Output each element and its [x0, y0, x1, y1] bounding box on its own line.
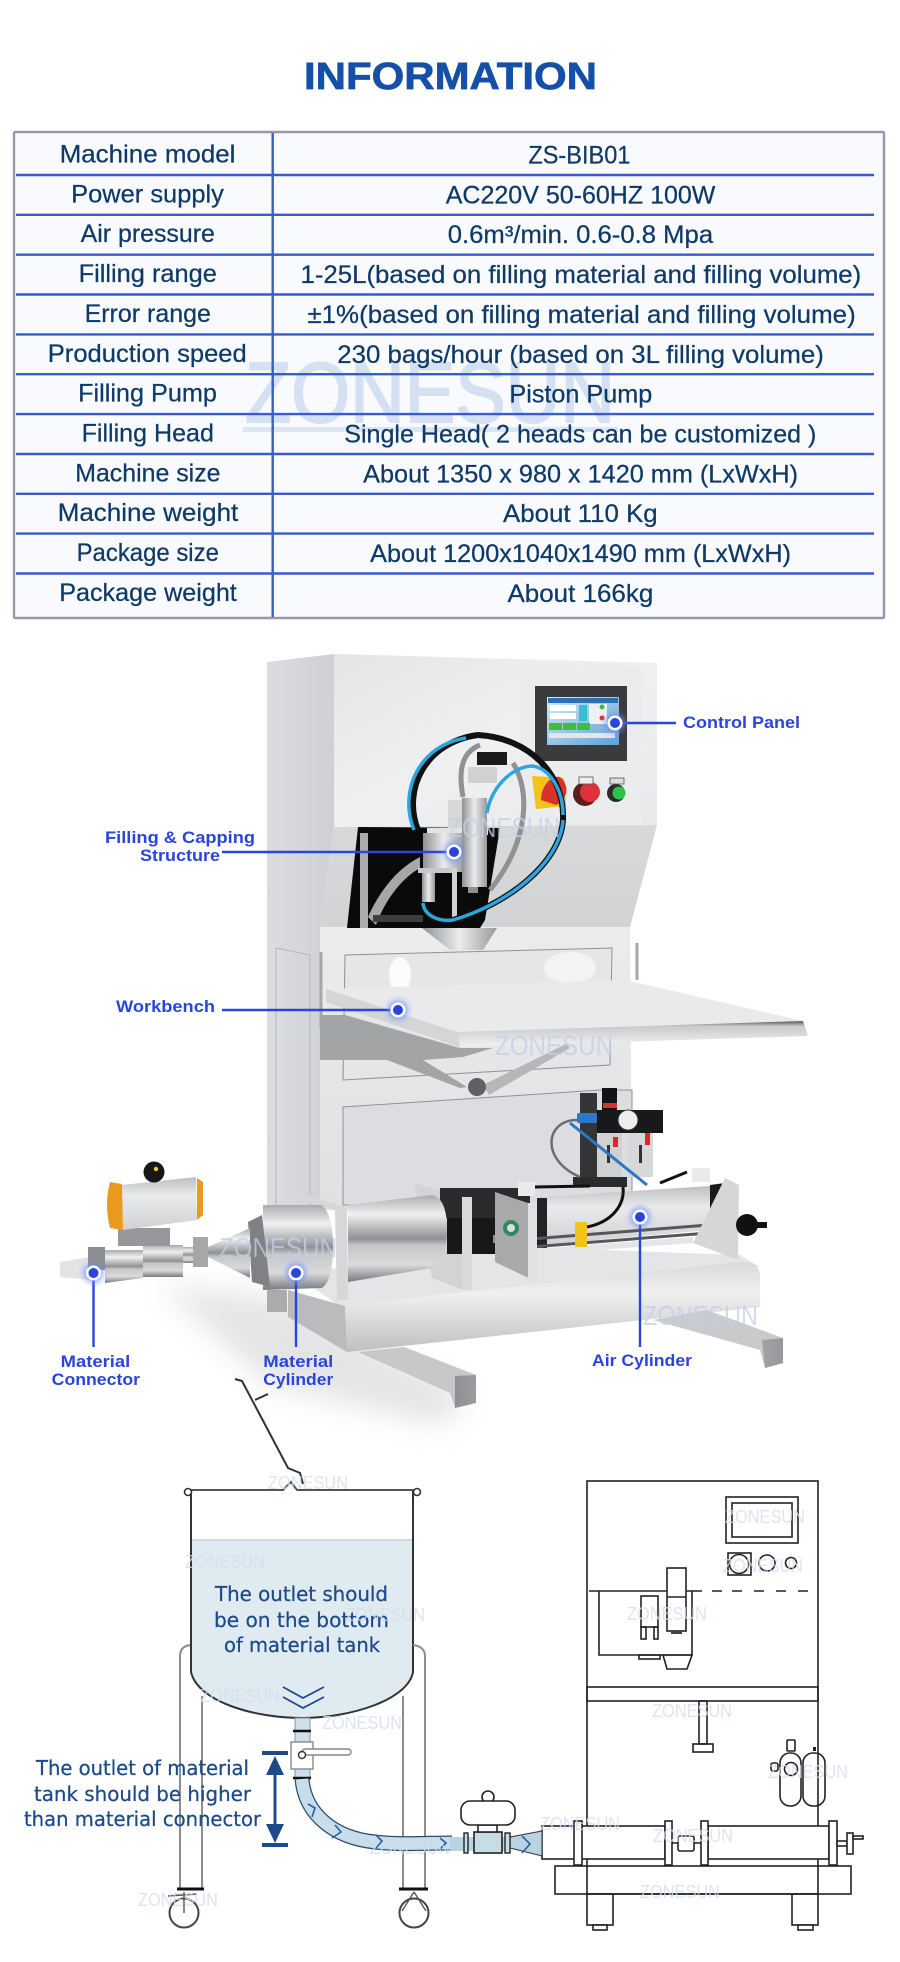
note: outlet height: than material connector	[24, 1807, 262, 1831]
workbench	[326, 980, 808, 1047]
watermarks: small: ZONESUN	[653, 1826, 733, 1846]
workbench shadow	[320, 1015, 493, 1088]
watermarks: small: ZONESUN	[723, 1556, 803, 1576]
row: machine model	[60, 140, 630, 170]
material cylinder	[208, 1192, 447, 1300]
row: machine model: ZS-BIB01	[528, 141, 630, 170]
valve and actuator	[60, 1162, 208, 1283]
diagram: material tank	[24, 1379, 452, 1928]
table text rows	[48, 140, 861, 608]
callout: material cylinder: Cylinder	[263, 1370, 334, 1389]
note: tank bottom	[214, 1582, 389, 1657]
machine frame	[587, 1481, 818, 1894]
slanted section	[320, 825, 657, 927]
title: INFORMATION	[304, 56, 597, 98]
row: filling range: 1-25L(based on filling material and filling volume)	[300, 261, 861, 289]
watermarks: small: ZONESUN	[200, 1686, 280, 1706]
base plate	[555, 1866, 851, 1894]
callout: material cylinder	[263, 1263, 334, 1389]
watermarks: small: ZONESUN	[268, 1473, 348, 1493]
row: filling head: Filling Head	[82, 419, 214, 447]
callout: air cylinder: Air Cylinder	[592, 1351, 692, 1370]
drawer panel	[343, 948, 612, 1080]
floor shadow	[160, 1285, 470, 1425]
row: filling range	[79, 260, 861, 289]
callout: workbench	[116, 997, 408, 1020]
row: filling pump: Piston Pump	[509, 381, 652, 409]
filling box	[599, 1568, 692, 1669]
row: package weight: About 166kg	[507, 580, 653, 608]
note: outlet height: tank should be higher	[34, 1782, 252, 1806]
callout: workbench: Workbench	[116, 997, 215, 1016]
hose: black air lines	[413, 735, 563, 920]
watermark: machine middle: ZONESUN	[495, 1030, 613, 1061]
row: filling pump	[78, 380, 652, 409]
air filters	[771, 1740, 825, 1806]
panel: specification table	[14, 132, 884, 618]
callout: material cylinder: Material	[263, 1352, 333, 1371]
air cylinder	[518, 1168, 767, 1260]
row: air pressure: Air pressure	[81, 220, 215, 248]
buttons	[728, 1553, 796, 1575]
dark filling cavity	[347, 827, 500, 928]
gas strut	[468, 1044, 570, 1096]
watermarks: small: ZONESUN	[345, 1605, 425, 1625]
watermarks: small: ZONESUN	[322, 1713, 402, 1733]
row: production speed: 230 bags/hour (based on 3L filling volume)	[337, 341, 824, 369]
callout: filling and capping structure: Filling & Capping	[105, 828, 255, 847]
legs	[587, 1894, 818, 1930]
watermark: machine upper: ZONESUN	[448, 812, 560, 843]
air filter unit	[551, 1088, 663, 1187]
callout: filling and capping structure	[105, 828, 464, 865]
row: filling range: Filling range	[79, 260, 217, 288]
valve	[450, 1791, 542, 1856]
side door outline	[276, 948, 310, 1210]
row: package size	[77, 539, 791, 568]
base tray	[267, 1245, 760, 1352]
emergency stop	[573, 777, 600, 806]
table grid lines	[16, 133, 874, 617]
cabinet front upper	[334, 654, 657, 827]
row: filling pump: Filling Pump	[78, 380, 217, 408]
callout: material connector: Material	[61, 1352, 130, 1371]
row: error range: Error range	[85, 300, 211, 328]
cylinder assembly	[542, 1821, 863, 1865]
machine photo illustration	[60, 654, 808, 1425]
black coupling	[440, 1188, 530, 1290]
casters	[168, 1889, 428, 1928]
tank legs	[180, 1645, 425, 1889]
row: air pressure	[81, 220, 713, 249]
green button	[607, 778, 626, 802]
watermarks: small: ZONESUN	[138, 1890, 218, 1910]
watermark: machine cylinder: ZONESUN	[219, 1232, 337, 1263]
cabinet front lower	[320, 927, 632, 1210]
callout: material connector: Connector	[52, 1370, 140, 1389]
row: machine size: Machine size	[75, 459, 220, 487]
row: error range	[85, 300, 856, 329]
callout: control panel: Control Panel	[683, 713, 800, 732]
callout: control panel	[605, 713, 800, 733]
arrow: height difference	[262, 1751, 288, 1847]
row: air pressure: 0.6m³/min. 0.6-0.8 Mpa	[448, 221, 713, 249]
row: machine weight: Machine weight	[58, 499, 238, 527]
funnel	[422, 928, 497, 950]
row: machine size	[75, 459, 798, 488]
note: tank bottom: of material tank	[224, 1633, 380, 1657]
row: production speed: Production speed	[48, 340, 247, 368]
hose: inner blue arc	[487, 766, 563, 815]
rear foot	[653, 1310, 783, 1368]
row: machine size: About 1350 x 980 x 1420 mm (LxWxH)	[363, 460, 798, 488]
watermark: table: ZONESUN	[245, 346, 615, 441]
strut	[693, 1701, 713, 1752]
outlet pipe and valve	[291, 1718, 351, 1779]
feed tube	[302, 1779, 452, 1849]
tank liquid	[191, 1540, 413, 1718]
tank rim	[188, 1482, 417, 1490]
watermarks: small: ZONESUN	[652, 1701, 732, 1721]
watermarks: small: ZONESUN	[185, 1552, 265, 1572]
note: tank bottom: The outlet should	[214, 1582, 388, 1606]
callout: material connector	[52, 1263, 140, 1389]
watermarks: small: ZONESUN	[640, 1882, 720, 1902]
diagram: machine line drawing	[450, 1481, 863, 1930]
cabinet side face	[267, 654, 334, 1210]
dashed line	[589, 1590, 808, 1592]
mounting plate	[495, 1192, 537, 1282]
note: outlet height	[24, 1756, 262, 1831]
row: package weight: Package weight	[59, 579, 237, 607]
workbench band	[587, 1687, 818, 1701]
gas upper hoses	[461, 745, 524, 890]
callout: filling and capping structure: Structure	[140, 846, 220, 865]
watermarks: small: ZONESUN	[540, 1814, 620, 1834]
note: tank bottom: be on the bottom	[214, 1608, 389, 1632]
row: machine weight: About 110 Kg	[503, 500, 658, 528]
row: package weight	[59, 579, 653, 608]
touch screen	[726, 1497, 798, 1543]
row: filling head: Single Head( 2 heads can be customized )	[344, 420, 816, 448]
rear bracket	[414, 1183, 463, 1290]
row: machine model: Machine model	[60, 140, 235, 169]
lid handle	[235, 1379, 303, 1484]
foot highlights	[455, 1338, 783, 1408]
bottom door	[343, 1090, 632, 1205]
latches	[321, 943, 637, 1028]
row: production speed	[48, 340, 824, 369]
row: power supply: AC220V 50-60HZ 100W	[446, 181, 716, 209]
front foot	[358, 1347, 476, 1408]
tank body outline	[191, 1490, 413, 1718]
note: outlet height: The outlet of material	[35, 1756, 249, 1780]
rotary switch	[532, 776, 566, 809]
filling head	[418, 752, 507, 920]
watermarks: small: ZONESUN	[627, 1604, 707, 1624]
chevrons	[283, 1687, 324, 1708]
watermarks: small	[138, 1473, 848, 1910]
row: power supply: Power supply	[71, 180, 224, 208]
watermarks: small: ZONESUN	[725, 1507, 805, 1527]
row: filling head	[82, 419, 816, 448]
row: package size: Package size	[77, 539, 219, 567]
row: package size: About 1200x1040x1490 mm (LxWxH)	[370, 540, 791, 568]
hose: blue air lines	[409, 738, 563, 920]
row: error range: ±1%(based on filling material and filling volume)	[307, 301, 856, 329]
watermark: machine base: ZONESUN	[643, 1300, 758, 1331]
watermarks: small: ZONESUN	[768, 1762, 848, 1782]
control panel plate	[520, 663, 642, 825]
callout: air cylinder	[592, 1207, 692, 1370]
watermarks: small: ZONESUN	[370, 1838, 450, 1858]
row: machine weight	[58, 499, 658, 528]
row: power supply	[71, 180, 716, 209]
